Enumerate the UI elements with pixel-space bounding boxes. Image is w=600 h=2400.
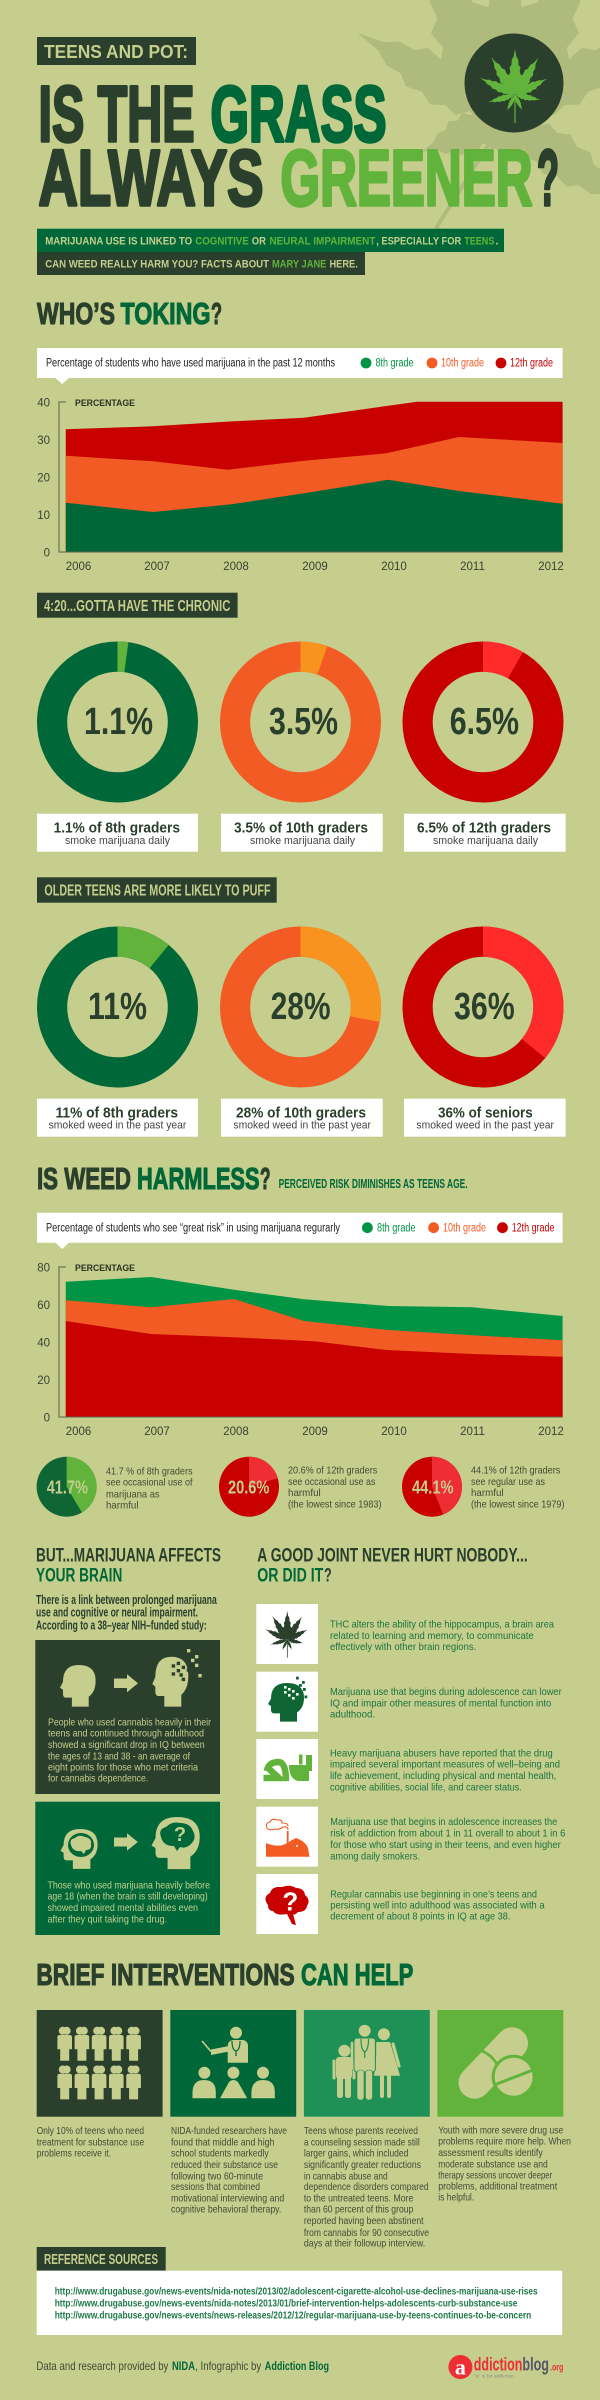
donut: 1.1% 8th graders daily — [52, 657, 183, 787]
legend bar: great risk — [37, 1213, 563, 1249]
text: decrement in IQ: decrement of about 8 points in IQ at age 38. — [330, 1911, 510, 1923]
section tag: older teens: OLDER TEENS ARE MORE LIKELY TO PUFF — [44, 883, 271, 900]
text: parents counseling session: dependence disorders compared — [304, 2181, 429, 2193]
heading: marijuana affects your brain: BUT...MARIJUANA AFFECTS — [36, 1546, 221, 1567]
footer credit: Addiction Blog — [265, 2359, 329, 2373]
text: impaired abilities: age 18 (when the brain is still developing) — [48, 1891, 208, 1903]
logo: addictionblog.org: ddiction — [474, 2355, 522, 2375]
donut: 28% 10th graders: 28% — [271, 986, 331, 1028]
text: NIDA-funded researchers: motivational interviewing and — [171, 2192, 284, 2204]
legend bar: past 12 months: Percentage of students who have used marijuana in the past 12 months — [46, 358, 335, 370]
tile: pills — [437, 2010, 563, 2117]
icon tile: smoking factory head — [256, 1807, 318, 1867]
paragraph: prolonged use link — [36, 1593, 217, 1632]
tile: ten people — [37, 2010, 163, 2117]
text: lower IQ — [330, 1686, 562, 1721]
area chart: perceived great risk: 2012 — [538, 1426, 564, 1438]
title tag: teens and pot — [37, 37, 196, 65]
text: parents counseling session: a counseling session made still — [304, 2136, 420, 2148]
note: 20.6% of 12th graders: (the lowest since 1983) — [288, 1498, 382, 1510]
text: well-being: life achievement, including physical and mental health, — [330, 1770, 556, 1782]
text: severe drug use: problems, additional treatment — [438, 2180, 557, 2192]
text: parents counseling session: days at their followup interview. — [304, 2238, 425, 2250]
main title — [38, 69, 559, 222]
text: well-being — [330, 1747, 560, 1793]
area chart: perceived great risk: 2006 — [66, 1426, 91, 1438]
text: well-being: impaired several important measures of well–being and — [330, 1759, 560, 1771]
footer credit: NIDA — [172, 2359, 195, 2373]
pie: 44.1%: 44.1% — [412, 1477, 454, 1497]
donut: 36% seniors — [418, 942, 548, 1072]
legend bar: great risk: Percentage of students who see “great risk” in using marijuana regurarly — [46, 1223, 340, 1235]
note: 41.7% of 8th graders: harmful — [106, 1499, 138, 1511]
caption: 11% of 8th graders — [37, 1099, 198, 1137]
caption: 28% of 10th graders: 28% of 10th graders — [236, 1105, 366, 1121]
area chart: past-year marijuana use: 2011 — [460, 561, 485, 573]
legend bar: past 12 months: 12th grade — [510, 358, 553, 370]
intro banner: cognitive impairment: COGNITIVE — [195, 235, 249, 247]
legend bar: past 12 months: 10th grade — [441, 358, 484, 370]
text: severe drug use: problems require more help. When — [438, 2136, 571, 2148]
caption: 6.5% of 12th graders — [404, 814, 566, 852]
note: 44.1% of 12th graders: harmful — [471, 1487, 504, 1499]
text: parents counseling session: Teens whose parents received — [304, 2125, 418, 2137]
icon: arrow — [114, 1833, 138, 1851]
area chart: perceived great risk: 20 — [37, 1375, 50, 1387]
caption: 1.1% of 8th graders: smoke marijuana daily — [65, 835, 170, 847]
footer credit: Data and research provided by — [36, 2359, 168, 2373]
legend bar: past 12 months: 8th grade — [376, 358, 414, 370]
caption: 36% of seniors: 36% of seniors — [438, 1105, 533, 1121]
text: NIDA-funded researchers: reduced their substance use — [171, 2159, 278, 2171]
text: lower IQ: adulthood. — [330, 1709, 375, 1721]
panel: impaired abilities — [35, 1802, 220, 1935]
caption: 28% of 10th graders: smoked weed in the past year — [233, 1120, 371, 1132]
reference sources tag: REFERENCE SOURCES — [44, 2251, 158, 2268]
caption: 6.5% of 12th graders: 6.5% of 12th graders — [417, 820, 551, 836]
heading: who's toking: ? — [211, 296, 222, 331]
caption: 6.5% of 12th graders: smoke marijuana daily — [433, 835, 538, 847]
intro banner: cognitive impairment: OR — [252, 235, 266, 247]
pie: 41.7% — [37, 1457, 97, 1517]
area chart: past-year marijuana use: 30 — [37, 435, 50, 447]
text: NIDA-funded researchers: NIDA-funded researchers have — [171, 2125, 287, 2137]
caption: 1.1% of 8th graders — [37, 814, 198, 852]
heading: is weed harmless: IS WEED — [37, 1161, 131, 1196]
heading: is weed harmless — [37, 1161, 468, 1196]
reference sources tag — [37, 2247, 166, 2271]
text: addiction risk: for those who start using in their teens, and even higher — [330, 1839, 561, 1851]
note: 20.6% of 12th graders — [288, 1465, 382, 1510]
area chart: past-year marijuana use: 2007 — [144, 561, 170, 573]
intro banner: facts about mary jane: CAN WEED REALLY HARM YOU? FACTS ABOUT — [45, 258, 269, 270]
text: IQ drop: for cannabis dependence. — [48, 1773, 148, 1785]
text: severe drug use: Youth with more severe drug use — [438, 2124, 563, 2136]
area chart: perceived great risk: 60 — [37, 1300, 50, 1312]
reference links panel — [37, 2271, 562, 2335]
text: parents counseling session: reported having been abstinent — [304, 2215, 424, 2227]
intro banner: cognitive impairment — [37, 229, 504, 252]
area chart: past-year marijuana use: 20 — [37, 472, 50, 484]
donut: 1.1% 8th graders daily: 1.1% — [84, 701, 153, 743]
logo: addictionblog.org: .org — [550, 2363, 563, 2374]
paragraph: prolonged use link: There is a link between prolonged marijuana — [36, 1593, 217, 1607]
donut: 6.5% 12th graders daily — [418, 657, 548, 787]
note: 44.1% of 12th graders: see regular use as — [471, 1476, 545, 1488]
logo: addictionblog.org — [448, 2354, 563, 2380]
text: parents counseling session: from cannabis for 90 consecutive — [304, 2227, 429, 2239]
note: 44.1% of 12th graders: 44.1% of 12th graders — [471, 1465, 560, 1477]
background cannabis leaf — [345, 0, 600, 229]
note: 20.6% of 12th graders: harmful — [288, 1487, 321, 1499]
caption: 3.5% of 10th graders: smoke marijuana daily — [250, 835, 355, 847]
area chart: perceived great risk: 40 — [37, 1338, 50, 1350]
note: 44.1% of 12th graders: (the lowest since 1979) — [471, 1498, 564, 1510]
heading: who's toking: TOKING — [120, 296, 210, 331]
caption: 36% of seniors — [404, 1099, 566, 1137]
text: IQ drop: the ages of 13 and 38 - an average of — [48, 1750, 190, 1762]
text: impaired abilities: Those who used marijuana heavily before — [48, 1879, 210, 1891]
area chart: perceived great risk: 2011 — [460, 1426, 485, 1438]
logo: addictionblog.org: a — [455, 2354, 466, 2380]
area chart: past-year marijuana use: PERCENTAGE — [75, 398, 135, 408]
note: 20.6% of 12th graders: 20.6% of 12th graders — [288, 1465, 377, 1477]
panel: IQ drop — [35, 1640, 220, 1794]
text: parents counseling session: than 60 percent of this group — [304, 2204, 413, 2216]
caption: 36% of seniors: smoked weed in the past year — [416, 1120, 554, 1132]
intro banner: facts about mary jane: HERE. — [330, 258, 358, 270]
area chart: perceived great risk: 2010 — [381, 1426, 407, 1438]
paragraph: prolonged use link: According to a 38–year NIH–funded study: — [36, 1618, 207, 1632]
icon: arrow — [114, 1674, 138, 1692]
area chart: perceived great risk: 2007 — [144, 1426, 170, 1438]
text: NIDA-funded researchers: school students markedly — [171, 2148, 269, 2160]
pie: 20.6% — [219, 1457, 279, 1517]
logo: addictionblog.org: "a" is for addiction — [474, 2374, 515, 2378]
section tag: 4:20 — [37, 593, 238, 618]
note: 20.6% of 12th graders: see occasional use as — [288, 1476, 375, 1488]
text: only 10% receive treatment: treatment for substance use — [37, 2136, 144, 2148]
icon tile: head dissolving — [256, 1672, 318, 1732]
text: severe drug use: therapy sessions uncover deeper — [438, 2169, 553, 2181]
heading: who's toking — [37, 296, 222, 331]
text: IQ drop: People who used cannabis heavily in their — [48, 1717, 211, 1729]
section tag: 4:20: 4:20...GOTTA HAVE THE CHRONIC — [44, 598, 231, 615]
caption: 1.1% of 8th graders: 1.1% of 8th graders — [54, 820, 180, 836]
heading: who's toking: WHO’S — [37, 296, 115, 331]
area chart: past-year marijuana use: 2010 — [381, 561, 407, 573]
text: NIDA-funded researchers: following two 60-minute — [171, 2170, 263, 2182]
area chart: perceived great risk: PERCENTAGE — [75, 1263, 135, 1273]
text: addiction risk — [330, 1816, 565, 1862]
reference links panel: http://www.drugabuse.gov/news-events/nida-notes/2013/01/brief-intervention-helps-adolescents-curb-substance-use — [55, 2298, 518, 2309]
icon: head with brain — [60, 1829, 98, 1869]
text: NIDA-funded researchers: found that middle and high — [171, 2136, 275, 2148]
heading: is weed harmless: ? — [260, 1161, 270, 1196]
note: 41.7% of 8th graders: see occasional use of — [106, 1477, 193, 1489]
text: IQ drop: showed a significant drop in IQ between — [48, 1739, 205, 1751]
caption: 3.5% of 10th graders: 3.5% of 10th graders — [234, 820, 368, 836]
donut: 11% 8th graders — [52, 942, 183, 1072]
area chart: perceived great risk: 2008 — [223, 1426, 249, 1438]
text: IQ drop: eight points for those who met criteria — [48, 1762, 198, 1774]
text: addiction risk: among daily smokers. — [330, 1850, 420, 1862]
paragraph: prolonged use link: use and cognitive or neural impairment. — [36, 1606, 198, 1620]
text: parents counseling session — [304, 2125, 429, 2250]
logo: addictionblog.org: blog — [522, 2355, 549, 2375]
icon tile: brain with question mark — [256, 1874, 318, 1934]
icon: healthy head — [60, 1665, 96, 1707]
heading: a good joint never hurt nobody — [257, 1546, 528, 1587]
text: decrement in IQ — [330, 1888, 545, 1923]
footer credit — [36, 2359, 329, 2373]
title tag: teens and pot: TEENS AND POT: — [44, 42, 188, 62]
area chart: past-year marijuana use: 2009 — [302, 561, 328, 573]
area chart: perceived great risk: 2009 — [302, 1426, 328, 1438]
area chart: perceived great risk: 0 — [44, 1412, 50, 1424]
text: decrement in IQ: Regular cannabis use beginning in one’s teens and — [330, 1888, 537, 1900]
caption: 11% of 8th graders: 11% of 8th graders — [56, 1105, 178, 1121]
area chart: past-year marijuana use: 2006 — [66, 561, 91, 573]
donut: 28% 10th graders — [235, 942, 366, 1072]
infographic canvas: ? — [537, 133, 559, 222]
text: parents counseling session: larger gains, which included — [304, 2148, 408, 2160]
donut: 3.5% 10th graders daily — [235, 657, 366, 787]
note: 41.7% of 8th graders: marijuana as — [106, 1488, 160, 1500]
text: IQ drop: teens and continued through adulthood — [48, 1728, 204, 1740]
text: severe drug use — [438, 2124, 571, 2204]
legend bar: great risk: 10th grade — [443, 1223, 486, 1235]
text: IQ drop — [48, 1717, 211, 1785]
area chart: past-year marijuana use: 40 — [37, 397, 50, 409]
text: THC: effectively with other brain regions. — [330, 1641, 476, 1653]
heading: is weed harmless: HARMLESS — [137, 1161, 260, 1196]
heading: a good joint never hurt nobody: OR DID IT — [257, 1566, 324, 1587]
intro banner: facts about mary jane — [37, 252, 365, 275]
text: parents counseling session: in cannabis abuse and — [304, 2170, 388, 2182]
text: severe drug use: assessment results identify — [438, 2147, 543, 2159]
icon tile: brain with question mark: ? — [282, 1887, 298, 1917]
intro banner: cognitive impairment: MARIJUANA USE IS LINKED TO — [45, 235, 192, 247]
intro banner: cognitive impairment: NEURAL IMPAIRMENT — [269, 235, 376, 247]
tile: family with doctor — [304, 2010, 430, 2117]
caption: 11% of 8th graders: smoked weed in the past year — [49, 1120, 187, 1132]
heading: is weed harmless: PERCEIVED RISK DIMINISHES AS TEENS AGE. — [279, 1177, 468, 1191]
icon tile: leaf — [256, 1604, 318, 1664]
icon: head with question mark — [152, 1817, 200, 1869]
area chart: past-year marijuana use: 2008 — [223, 561, 249, 573]
area chart: past-year marijuana use: 2012 — [538, 561, 564, 573]
tile: doctor teaching — [170, 2010, 296, 2117]
text: lower IQ: Marijuana use that begins during adolescence can lower — [330, 1686, 562, 1698]
area chart: past-year marijuana use: 10 — [37, 510, 50, 522]
area chart: perceived great risk: 80 — [37, 1262, 50, 1274]
text: NIDA-funded researchers: cognitive behavioral therapy. — [171, 2204, 281, 2216]
text: only 10% receive treatment: problems receive it. — [37, 2148, 111, 2160]
text: THC: THC alters the ability of the hippocampus, a brain area — [330, 1619, 554, 1631]
footer credit: , Infographic by — [195, 2359, 261, 2373]
main title: IS THE — [38, 69, 194, 158]
note: 44.1% of 12th graders — [471, 1465, 564, 1510]
text: only 10% receive treatment: Only 10% of teens who need — [37, 2125, 144, 2137]
icon: leaf in dark circle — [464, 34, 564, 132]
area chart: past-year marijuana use — [37, 397, 564, 573]
text: only 10% receive treatment — [37, 2125, 144, 2160]
heading: a good joint never hurt nobody: ? — [324, 1566, 332, 1587]
text: parents counseling session: to the untreated teens. More — [304, 2192, 413, 2204]
main title: ALWAYS — [38, 133, 264, 222]
area chart: perceived great risk — [37, 1262, 564, 1438]
donut: 36% seniors: 36% — [454, 986, 515, 1028]
intro banner: cognitive impairment: TEENS — [464, 235, 495, 247]
text: addiction risk: risk of addiction from about 1 in 11 overall to about 1 in 6 — [330, 1828, 565, 1840]
heading: brief interventions can help: BRIEF INTERVENTIONS — [36, 1957, 295, 1992]
area chart: past-year marijuana use: 0 — [44, 548, 50, 560]
text: impaired abilities: showed impaired mental abilities even — [48, 1902, 198, 1914]
pie: 20.6%: 20.6% — [228, 1477, 269, 1497]
text: lower IQ: IQ and impair other measures of mental function into — [330, 1697, 551, 1709]
text: severe drug use: is helpful. — [438, 2192, 474, 2204]
text: impaired abilities — [48, 1879, 210, 1925]
pie: 41.7%: 41.7% — [47, 1477, 88, 1497]
heading: brief interventions can help: CAN HELP — [301, 1957, 413, 1992]
section tag: older teens — [37, 877, 277, 903]
text: THC — [330, 1619, 554, 1653]
heading: marijuana affects your brain — [36, 1546, 221, 1587]
caption: 3.5% of 10th graders — [221, 814, 383, 852]
main title: GRASS — [210, 69, 386, 158]
caption: 28% of 10th graders — [221, 1099, 383, 1137]
text: well-being: cognitive abilities, social life, and career status. — [330, 1781, 522, 1793]
intro banner: cognitive impairment: . — [495, 235, 499, 247]
icon tile: person vomiting — [256, 1739, 318, 1799]
text: well-being: Heavy marijuana abusers have reported that the drug — [330, 1747, 553, 1759]
donut: 11% 8th graders: 11% — [88, 986, 147, 1028]
heading: marijuana affects your brain: YOUR BRAIN — [36, 1566, 122, 1587]
pie: 44.1% — [402, 1457, 462, 1517]
text: THC: related to learning and memory, to communicate — [330, 1630, 534, 1642]
text: NIDA-funded researchers: sessions that combined — [171, 2181, 260, 2193]
intro banner: cognitive impairment: , ESPECIALLY FOR — [376, 235, 461, 247]
text: impaired abilities: after they quit taking the drug. — [48, 1913, 167, 1925]
text: severe drug use: moderate substance use and — [438, 2158, 548, 2170]
note: 41.7% of 8th graders: 41.7 % of 8th graders — [106, 1465, 192, 1477]
legend bar: great risk: 8th grade — [377, 1223, 416, 1235]
legend bar: great risk: 12th grade — [512, 1223, 554, 1235]
icon: head with dissolving brain — [152, 1649, 202, 1707]
icon: head with question mark: ? — [174, 1824, 186, 1846]
donut: 3.5% 10th graders daily: 3.5% — [269, 701, 338, 743]
text: decrement in IQ: persisting well into adulthood was associated with a — [330, 1900, 545, 1912]
donut: 6.5% 12th graders daily: 6.5% — [450, 701, 519, 743]
intro banner: facts about mary jane: MARY JANE — [272, 258, 327, 270]
text: NIDA-funded researchers — [171, 2125, 287, 2216]
text: addiction risk: Marijuana use that begins in adolescence increases the — [330, 1816, 557, 1828]
text: parents counseling session: significantly greater reductions — [304, 2159, 421, 2171]
legend bar: past 12 months — [37, 348, 563, 384]
note: 41.7% of 8th graders — [106, 1465, 193, 1511]
